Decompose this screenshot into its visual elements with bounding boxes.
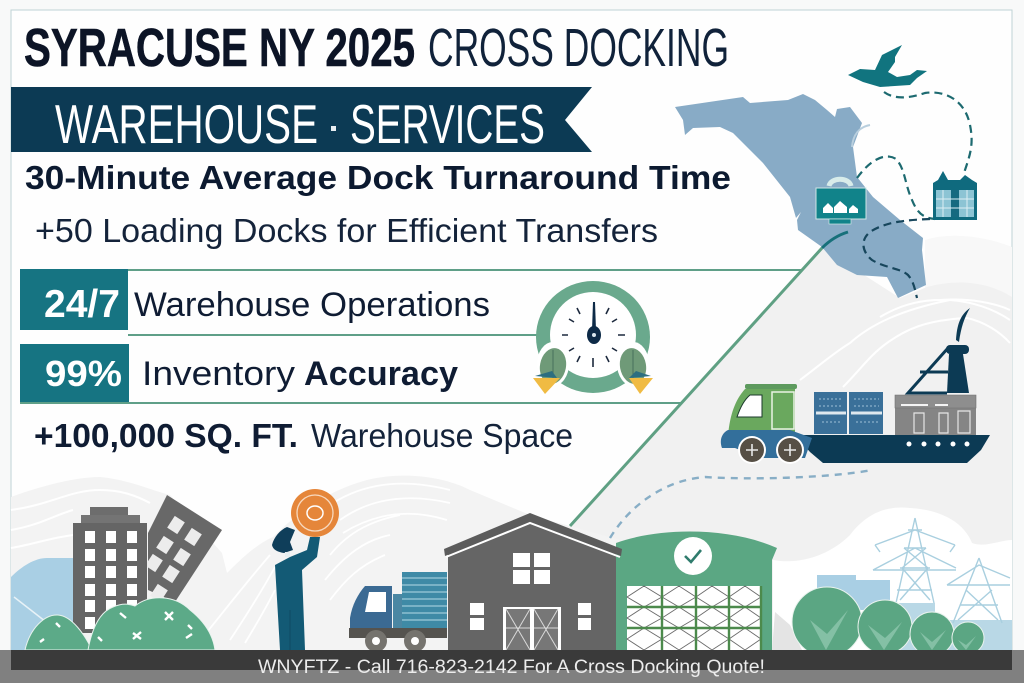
background: grey hills with contour lines	[11, 236, 1012, 650]
footer bar	[0, 650, 1024, 683]
stat: 99% accuracy: Inventory	[142, 355, 295, 393]
route: dashed paths	[857, 92, 972, 298]
stat: warehouse space: +100,000 SQ. FT.	[34, 417, 298, 454]
stat: warehouse space	[34, 417, 573, 454]
icon: cargo ship and truck	[721, 308, 990, 464]
stat: 24/7 operations: Warehouse Operations	[134, 286, 490, 324]
banner: warehouse services: WAREHOUSE	[55, 93, 318, 155]
icon: warehouse badge on map	[816, 179, 866, 224]
stat: 99% accuracy: Accuracy	[304, 355, 458, 393]
stat: 99% accuracy: 99%	[45, 353, 122, 394]
stat: warehouse space: Warehouse Space	[311, 417, 573, 454]
stat: 24/7 operations: 24/7	[44, 283, 120, 326]
title: SYRACUSE NY 2025	[24, 18, 415, 78]
stat: 24/7 operations	[20, 269, 490, 330]
illustration: round green trees	[792, 587, 984, 657]
title: CROSS DOCKING	[428, 18, 729, 78]
headline stat: dock turnaround: 30-Minute Average Dock Turnaround Time	[25, 159, 731, 196]
illustration: port cranes and city	[817, 518, 1012, 650]
connector: diagonal line from map to warehouse	[570, 232, 848, 526]
icon: bird	[848, 45, 927, 87]
icon: calendar	[933, 171, 977, 220]
illustration: office buildings and bushes	[25, 495, 222, 650]
banner: warehouse services: SERVICES	[350, 93, 545, 155]
illustration: delivery truck	[349, 572, 447, 652]
stat: loading docks: +50 Loading Docks for Efficient Transfers	[35, 212, 658, 249]
footer bar: WNYFTZ - Call 716-823-2142 For A Cross Docking Quote!	[258, 657, 765, 678]
icon: clock with leaves	[533, 281, 653, 394]
route: dashed line to ship	[610, 470, 872, 538]
illustration: person holding orange coin	[272, 489, 339, 650]
illustration: green cross-dock warehouse	[616, 532, 777, 650]
map: state silhouette	[675, 94, 926, 298]
illustration: grey warehouse	[444, 513, 622, 650]
banner: warehouse services	[11, 87, 592, 155]
dividers	[20, 270, 802, 403]
stat: 99% accuracy	[20, 344, 458, 402]
